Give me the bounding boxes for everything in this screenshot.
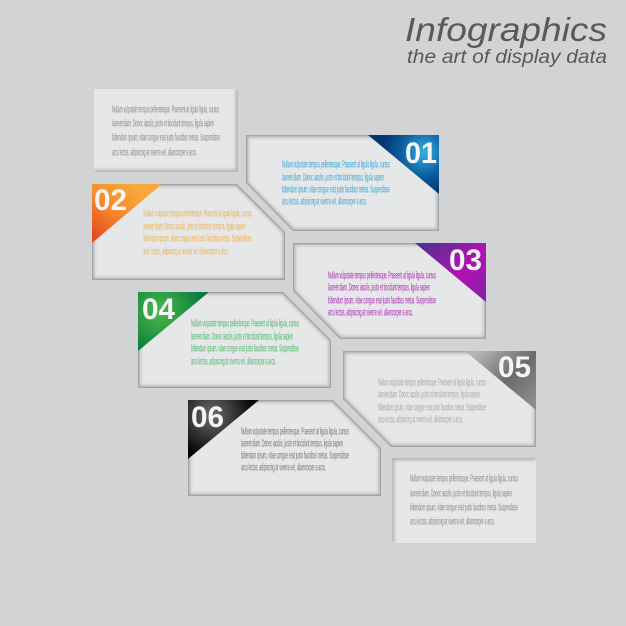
panel: 01: arcu lectus, adipiscing at viverra vel, ullamcorper a arcu. [282,196,367,208]
panel: 02: arcu lectus, adipiscing at viverra vel, ullamcorper a arcu. [144,246,228,258]
panel: 03 [293,243,486,339]
text: Nullam vulputate tempus pellentesque. Praesent at ligula ligula, cursus [144,208,252,220]
text: laoreet diam. Donec iaculis, justo et tincidunt tempus, ligula sapien [191,330,293,342]
number: 04: 04 [142,293,175,326]
number: 01: 01 [405,137,437,170]
panel: 01 [246,135,439,231]
text: arcu lectus, adipiscing at viverra vel, ullamcorper a arcu. [112,146,197,158]
heading: Infographics: Infographics [405,11,607,48]
text block: 04 [191,318,299,368]
text: Nullam vulputate tempus pellentesque. Praesent at ligula ligula, cursus [282,158,390,170]
corner: 05 grey triangle [465,351,536,410]
text block: 05 [378,376,486,426]
panel: 03: arcu lectus, adipiscing at viverra vel, ullamcorper a arcu. [328,306,413,318]
title [405,11,607,68]
panel: 01: laoreet diam. Donec iaculis, justo et tincidunt tempus, ligula sapien [282,172,384,184]
corner: 06 black triangle [188,400,259,459]
panel: 04: arcu lectus, adipiscing at viverra vel, ullamcorper a arcu. [191,356,276,368]
corner: 03 purple triangle [415,243,486,302]
panel: 04 [138,292,331,388]
number: 03: 03 [449,244,482,277]
panel: 05 [343,351,536,447]
subtitle: the art of display data [407,46,607,68]
corner: 01 blue triangle [368,135,439,194]
text: Nullam vulputate tempus pellentesque. Praesent at ligula ligula, cursus [191,318,299,330]
corner: 02 orange triangle [92,184,162,243]
text block: 06 [241,426,349,474]
panel: 06: arcu lectus, adipiscing at viverra vel, ullamcorper a arcu. [241,462,326,474]
panel: bottom grey note [392,458,536,543]
text: bibendum ipsum, vitae congue erat justo faucibus metus. Suspendisse [282,184,390,196]
text: bibendum ipsum, vitae congue erat justo faucibus metus. Suspendisse [112,132,220,144]
number: 06: 06 [191,401,224,434]
text: bibendum ipsum, vitae congue erat justo faucibus metus. Suspendisse [191,342,299,354]
text: laoreet diam. Donec iaculis, justo et tincidunt tempus, ligula sapien [144,220,246,232]
text block: 01 [282,158,390,208]
text block: 03 [328,270,436,318]
number: 02: 02 [94,184,127,217]
text block: top grey note [112,104,220,158]
panel: 06 [188,400,381,496]
panel: 02 [92,184,285,280]
panel: top grey note [94,89,238,172]
text: bibendum ipsum, vitae congue erat justo faucibus metus. Suspendisse [144,232,252,244]
text block: bottom grey note [410,472,518,528]
text: laoreet diam. Donec iaculis, justo et tincidunt tempus, ligula sapien [112,118,214,130]
corner: 04 green triangle [138,292,209,351]
text: Nullam vulputate tempus pellentesque. Praesent at ligula ligula, cursus [112,104,219,116]
text: Nullam vulputate tempus pellentesque. Praesent at ligula ligula, cursus [241,426,349,438]
text: bibendum ipsum, vitae congue erat justo faucibus metus. Suspendisse [241,450,349,462]
text: laoreet diam. Donec iaculis, justo et tincidunt tempus, ligula sapien [241,438,343,450]
text block: 02 [144,208,252,258]
number: 05: 05 [498,351,531,384]
